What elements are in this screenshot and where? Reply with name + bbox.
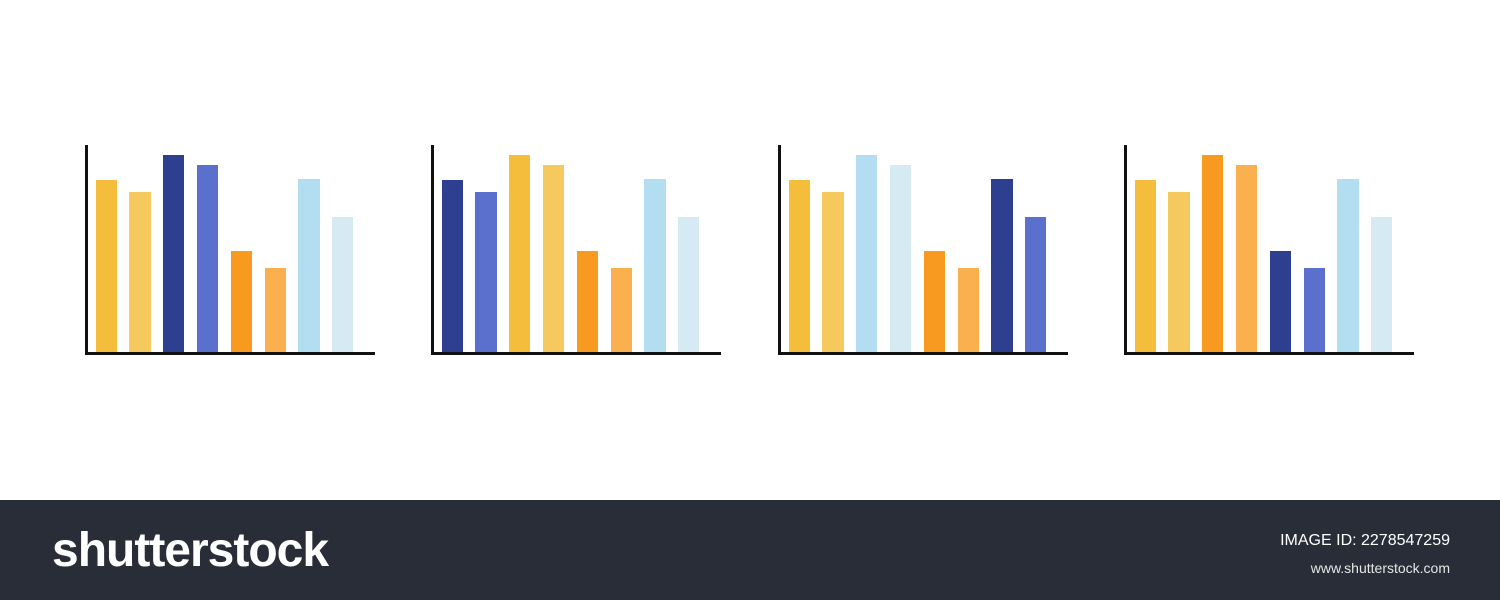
website: www.shutterstock.com	[1310, 560, 1450, 576]
chart 4	[1124, 145, 1414, 355]
chart 1	[85, 145, 375, 355]
chart 2	[431, 145, 721, 355]
footer logo: shutterstock	[52, 524, 329, 577]
chart 3	[778, 145, 1068, 355]
footer bar	[0, 500, 1500, 600]
image id: IMAGE ID: 2278547259	[1280, 532, 1450, 549]
